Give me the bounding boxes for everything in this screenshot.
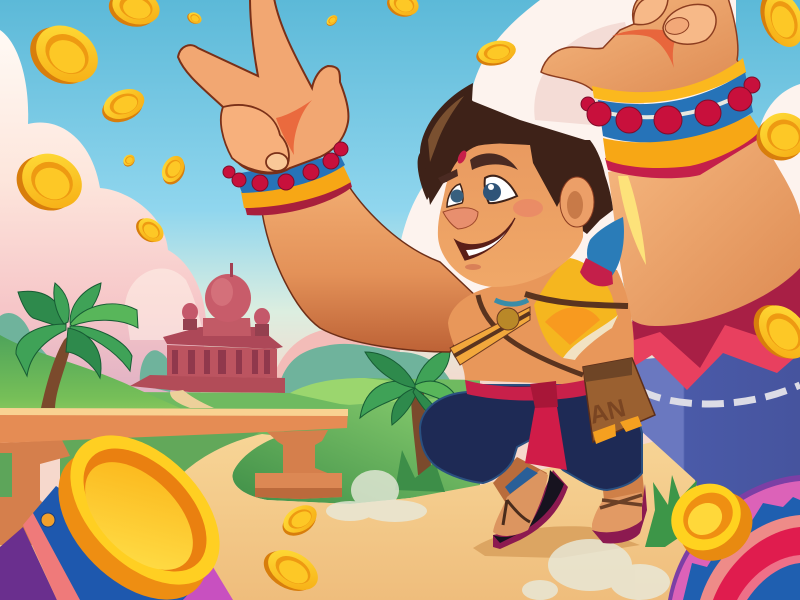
red waist with zigzag: [632, 250, 800, 390]
plant near right cannon: [645, 475, 697, 547]
left foot: [493, 470, 548, 536]
center palm tree: [360, 350, 462, 492]
hair highlight: [428, 96, 464, 162]
pouch: [583, 358, 655, 444]
wrist gold band: [241, 165, 351, 208]
red sash: [465, 380, 587, 401]
sandy path and ground: [0, 434, 800, 600]
left clouds: [0, 30, 206, 400]
lower-left grass: [60, 432, 260, 510]
lower cuff gold band: [603, 115, 760, 168]
face: [438, 143, 583, 287]
hero torso: [448, 217, 655, 470]
cloud shadow behind raised hand: [534, 22, 650, 130]
arm highlight: [618, 176, 646, 265]
small temple path: [170, 390, 214, 408]
left cannon with gold rim: [0, 407, 248, 600]
blue trousers: [633, 345, 800, 500]
front hair: [425, 100, 590, 207]
haze behind temple: [275, 328, 400, 400]
back hair: [418, 83, 613, 234]
nose: [443, 208, 478, 229]
right shin: [603, 470, 645, 510]
lower cuff red band: [605, 130, 762, 178]
chest strap lower: [478, 295, 583, 375]
fingers: [634, 0, 668, 25]
ear: [560, 177, 594, 227]
bead string: [590, 90, 750, 117]
large foreground coin: [658, 470, 766, 575]
cuff gold top band: [592, 58, 746, 103]
pale cloud glow beside temple: [125, 268, 205, 340]
curled fingers: [221, 105, 289, 172]
victory hand: [178, 0, 348, 174]
smile: [455, 218, 515, 260]
wrist blue band: [235, 155, 345, 193]
teeth: [466, 232, 506, 256]
wrist red band: [245, 180, 352, 215]
stone bridge wall: [0, 408, 348, 545]
gold sling: [450, 307, 530, 365]
palm crease: [276, 100, 312, 155]
hero legs: [420, 385, 647, 549]
cheek blush: [513, 199, 543, 217]
center green hill: [232, 395, 480, 504]
feather: [587, 217, 624, 276]
ankle band: [505, 467, 538, 494]
beads: [581, 77, 760, 134]
lip: [465, 264, 481, 270]
hero head: [418, 83, 613, 287]
left sandal upper: [493, 470, 564, 543]
cuff blue band: [598, 72, 753, 142]
bindi: [456, 149, 468, 165]
eyebrows: [470, 153, 518, 170]
distant trees: [0, 313, 450, 400]
navy trousers: [420, 385, 642, 490]
right cloud behind hero: [398, 0, 736, 300]
raised hand: [541, 0, 745, 94]
right cloud at the edge: [756, 84, 800, 260]
necklace: [495, 300, 528, 304]
smoke puffs: [326, 470, 670, 600]
right arm and background trousers: [541, 0, 800, 500]
shawl fringe: [563, 315, 618, 360]
temple: [130, 263, 285, 393]
palm crease: [612, 29, 678, 68]
left sandal straps: [503, 500, 530, 525]
far meadow: [128, 378, 480, 440]
left arm and hand: [178, 0, 480, 352]
foot shadow: [473, 526, 640, 558]
trouser stitching: [640, 385, 800, 404]
left palm tree: [16, 283, 138, 408]
left sandal sole: [493, 470, 568, 549]
light hill on the right: [290, 378, 400, 410]
eyes: [485, 176, 517, 203]
medallion: [497, 308, 519, 330]
left shin: [493, 457, 547, 505]
shoulder strap: [525, 294, 628, 306]
left green hill: [0, 335, 180, 440]
golden shawl: [534, 258, 618, 358]
pouch letters: AN: [587, 394, 628, 430]
right cannon: [668, 475, 800, 600]
right sandal: [592, 484, 647, 543]
beads: [223, 142, 348, 191]
arm: [608, 135, 800, 326]
